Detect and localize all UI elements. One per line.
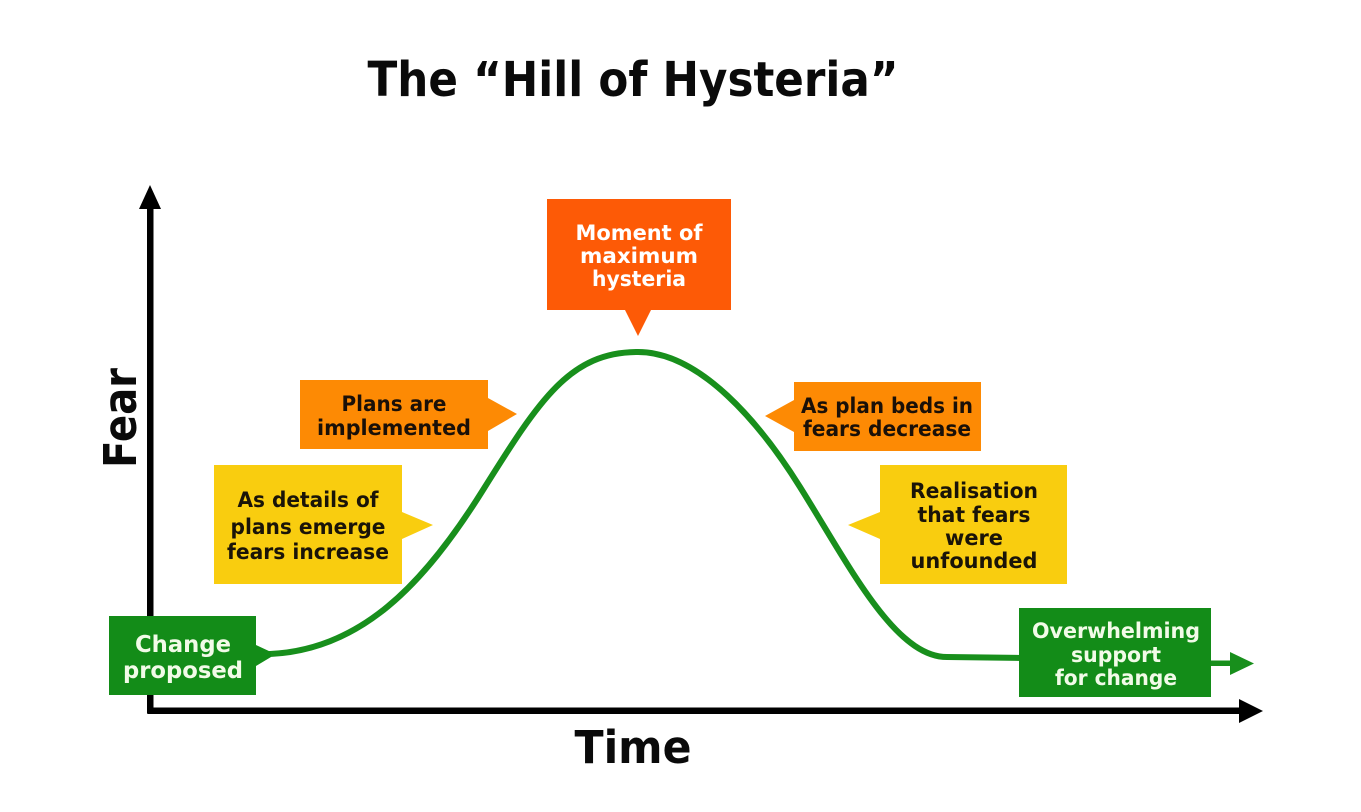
callout: moment of maximum hysteria: hysteria xyxy=(592,267,686,291)
callout: realisation that fears were unfounded: Realisation xyxy=(910,479,1038,503)
x axis arrow xyxy=(147,699,1263,723)
callout: plans are implemented xyxy=(300,380,517,449)
callout: change proposed xyxy=(109,616,271,695)
callout: realisation that fears were unfounded: were xyxy=(945,526,1003,550)
callout: as details of plans emerge: As details of xyxy=(238,488,379,512)
callout: overwhelming support for change: Overwhelming xyxy=(1032,619,1200,643)
y axis arrow xyxy=(139,185,161,714)
callout: overwhelming support for change: for change xyxy=(1055,666,1177,690)
callout: as details of plans emerge xyxy=(214,465,433,584)
callout: as plan beds in: fears decrease xyxy=(803,417,971,441)
callout: as details of plans emerge: fears increase xyxy=(227,540,389,564)
callout: overwhelming support for change xyxy=(1019,608,1211,697)
callout: plans are implemented: Plans are xyxy=(342,392,446,416)
callout: change proposed: proposed xyxy=(123,658,243,684)
callout: moment of maximum hysteria: maximum xyxy=(580,244,698,268)
callout: as details of plans emerge: plans emerge xyxy=(230,515,386,539)
callout: moment of maximum hysteria xyxy=(547,199,731,336)
callout: change proposed: Change xyxy=(135,632,231,658)
hill curve xyxy=(256,352,1022,658)
callout: realisation that fears were unfounded: that fears xyxy=(918,503,1030,527)
callout: moment of maximum hysteria: Moment of xyxy=(576,221,703,245)
callout: realisation that fears were unfounded xyxy=(848,465,1067,584)
callout: plans are implemented: implemented xyxy=(317,416,471,440)
y axis label: Fear xyxy=(94,367,147,468)
end arrow xyxy=(1205,652,1254,675)
title: The “Hill of Hysteria” xyxy=(368,52,898,108)
callout: realisation that fears were unfounded: unfounded xyxy=(910,549,1038,573)
callout: as plan beds in: As plan beds in xyxy=(801,394,973,418)
callout: overwhelming support for change: support xyxy=(1071,643,1161,667)
x axis label: Time xyxy=(574,721,692,774)
callout: as plan beds in xyxy=(765,382,981,451)
